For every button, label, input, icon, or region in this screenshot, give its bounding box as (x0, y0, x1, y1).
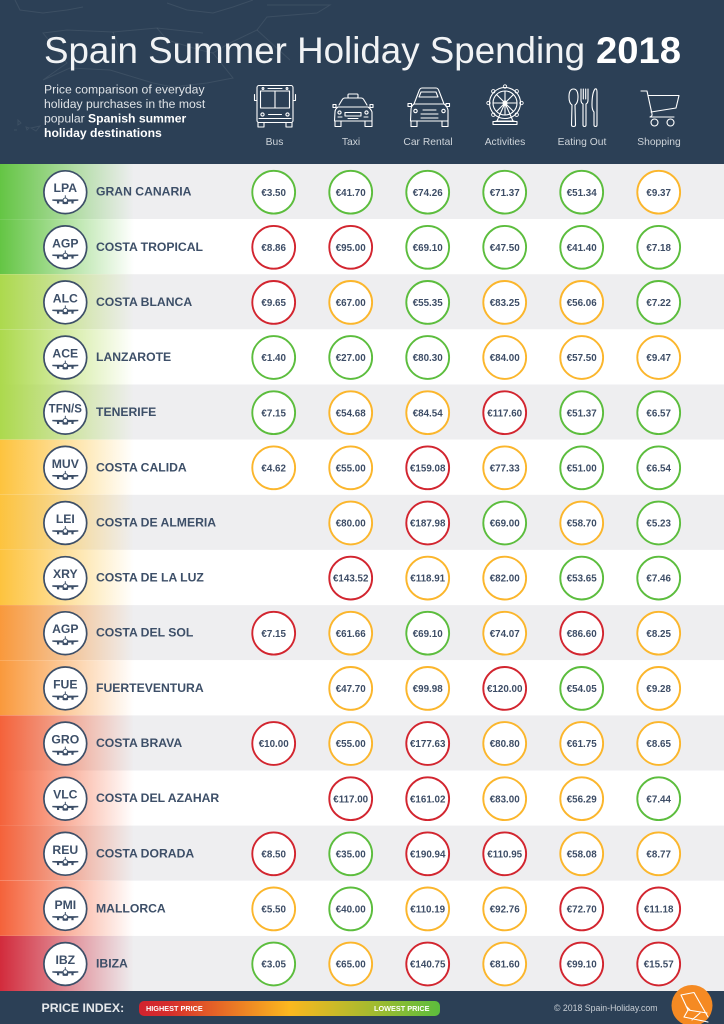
price cells: €99.98 (413, 684, 443, 695)
price cells: €117.60 (487, 408, 523, 419)
header background (0, 0, 724, 164)
row: Gran Canaria (0, 164, 724, 219)
price cells: €65.00 (336, 960, 366, 971)
price cells: €3.05 (261, 960, 287, 971)
badge: XRY (44, 557, 87, 599)
price cells (252, 281, 680, 324)
destination name: MALLORCA (96, 901, 166, 915)
label: activities: Activities (485, 137, 525, 148)
badge: GRO (44, 722, 87, 765)
title year: 2018 (596, 30, 681, 71)
price cells: €110.19 (410, 904, 446, 916)
row: Costa Calida (0, 440, 724, 495)
row: Costa Brava (0, 715, 724, 770)
row: Costa Tropical (0, 219, 724, 274)
price cells: €77.33 (490, 463, 520, 474)
badge: FUE: FUE (53, 677, 77, 691)
price cells: €11.18 (644, 904, 674, 916)
price cells: €5.23 (646, 519, 672, 530)
price cells: €143.52 (333, 574, 369, 585)
row: Ibiza (0, 936, 724, 992)
label: car rental: Car Rental (403, 137, 453, 148)
price cells (252, 612, 680, 655)
price cells: €54.68 (336, 408, 366, 419)
price cells: €83.00 (490, 794, 520, 805)
row: Fuerteventura (0, 660, 724, 715)
icon: cutlery (569, 89, 597, 126)
price cells: €55.00 (336, 463, 366, 474)
price cells: €27.00 (336, 353, 366, 364)
badge: VLC (44, 777, 87, 820)
price cells: €54.05 (567, 684, 597, 695)
price cells: €72.70 (567, 904, 597, 916)
label: bus: Bus (266, 137, 283, 148)
price cells (329, 502, 680, 544)
destination name: COSTA CALIDA (96, 460, 187, 474)
badge: TFN/S (44, 391, 87, 434)
destination name: COSTA BLANCA (96, 295, 192, 309)
icon: shopping cart (641, 91, 679, 126)
badge: IBZ (44, 943, 87, 985)
price cells: €190.94 (410, 849, 446, 860)
destination name: COSTA TROPICAL (96, 240, 204, 254)
price cells: €56.29 (567, 794, 597, 805)
price cells: €74.26 (413, 188, 443, 199)
price cells (252, 336, 680, 379)
badge: ACE: ACE (52, 346, 78, 360)
destination name: COSTA DEL AZAHAR (96, 791, 219, 805)
label: shopping: Shopping (637, 137, 681, 148)
badge: AGP (44, 612, 87, 655)
price cells: €81.60 (490, 960, 520, 971)
destination name: IBIZA (96, 956, 128, 970)
price cells: €8.50 (261, 849, 287, 860)
price cells: €35.00 (336, 849, 366, 860)
price cells: €15.57 (644, 960, 674, 971)
price cells (252, 391, 680, 434)
price cells (252, 722, 680, 765)
price cells: €5.50 (261, 904, 287, 916)
price cells: €9.28 (646, 684, 672, 695)
price cells: €7.15 (261, 629, 287, 640)
price cells: €8.86 (261, 243, 287, 254)
row: Costa Blanca (0, 274, 724, 329)
price cells: €61.66 (336, 629, 366, 640)
price cells: €118.91 (410, 574, 446, 585)
price cells: €161.02 (410, 794, 446, 805)
price cells: €41.70 (336, 188, 366, 199)
price cells: €41.40 (567, 243, 597, 254)
price cells: €55.00 (336, 739, 366, 750)
icon: bus (254, 86, 296, 127)
price cells: €9.37 (646, 188, 672, 199)
badge: LEI (44, 502, 87, 544)
destination name: GRAN CANARIA (96, 185, 192, 199)
destination name: FUERTEVENTURA (96, 681, 204, 695)
badge: REU (44, 832, 87, 875)
badge: PMI (44, 888, 87, 930)
price cells: €69.10 (413, 629, 443, 640)
price cells: €177.63 (410, 739, 446, 750)
destination name: COSTA DORADA (96, 846, 194, 860)
price cells: €56.06 (567, 298, 597, 309)
footer background (0, 991, 724, 1024)
title: Spain Summer Holiday Spending (44, 30, 585, 71)
price cells: €47.50 (490, 243, 520, 254)
price cells: €69.00 (490, 519, 520, 530)
price index gradient bar: LOWEST PRICE (374, 1004, 430, 1013)
destination name: COSTA DE LA LUZ (96, 571, 204, 585)
badge: ALC: ALC (53, 291, 78, 305)
price cells: €10.00 (259, 739, 289, 750)
price cells: €51.00 (567, 463, 597, 474)
row: Costa Dorada (0, 826, 724, 881)
row: Lanzarote (0, 329, 724, 384)
price cells (252, 943, 680, 985)
badge: ALC (44, 281, 87, 324)
price index label: PRICE INDEX: (42, 1001, 124, 1015)
destination name: COSTA BRAVA (96, 736, 182, 750)
intro text: popular Spanish summer (44, 112, 187, 126)
price cells: €8.25 (646, 629, 672, 640)
price cells: €84.54 (413, 408, 443, 419)
price cells: €47.70 (336, 684, 366, 695)
price cells: €80.80 (490, 739, 520, 750)
faint map of Spain (14, 0, 330, 131)
price cells: €83.25 (490, 298, 520, 309)
icon: beach chair badge (672, 985, 712, 1024)
row: Costa del Azahar (0, 770, 724, 826)
row: Costa de Almeria (0, 495, 724, 550)
destination name: TENERIFE (96, 405, 156, 419)
badge: GRO: GRO (51, 732, 79, 746)
price cells: €95.00 (336, 243, 366, 254)
badge: PMI: PMI (54, 898, 76, 912)
price cells (252, 832, 680, 875)
price cells: €117.00 (333, 794, 369, 805)
row: Mallorca (0, 881, 724, 936)
intro text (44, 82, 206, 140)
price cells (329, 777, 680, 820)
price cells: €86.60 (567, 629, 597, 640)
badge: LEI: LEI (56, 512, 75, 526)
price cells: €58.08 (567, 849, 597, 860)
price cells: €7.46 (646, 574, 672, 585)
price cells: €3.50 (261, 188, 287, 199)
intro text: Price comparison of everyday (44, 82, 205, 96)
price cells: €51.34 (567, 188, 597, 199)
price index gradient bar (139, 1001, 440, 1016)
badge: MUV (44, 446, 87, 489)
price cells: €7.18 (646, 243, 672, 254)
intro text: holiday purchases in the most (44, 97, 206, 111)
row: Costa del Sol (0, 605, 724, 660)
label: taxi: Taxi (342, 137, 360, 148)
price cells: €80.30 (413, 353, 443, 364)
price cells: €71.37 (490, 188, 520, 199)
icon: car rental (408, 88, 450, 126)
price cells: €92.76 (490, 904, 520, 916)
badge: AGP: AGP (52, 236, 79, 250)
price cells (329, 667, 680, 710)
price cells: €7.22 (646, 298, 672, 309)
price cells: €120.00 (487, 684, 523, 695)
price cells: €53.65 (567, 574, 597, 585)
badge: ACE (44, 336, 87, 379)
price cells: €58.70 (567, 519, 597, 530)
price cells: €4.62 (261, 463, 287, 474)
badge: AGP: AGP (52, 622, 79, 636)
badge: LPA: LPA (54, 181, 77, 195)
price cells: €67.00 (336, 298, 366, 309)
price cells (252, 226, 680, 269)
intro text: holiday destinations (44, 126, 162, 140)
price cells: €140.75 (410, 960, 446, 971)
icon: taxi (333, 94, 373, 126)
badge: AGP (44, 226, 87, 269)
price cells: €1.40 (261, 353, 287, 364)
price cells: €74.07 (490, 629, 520, 640)
price cells: €8.77 (646, 849, 672, 860)
price cells (329, 557, 680, 599)
price cells: €110.95 (487, 849, 523, 860)
price cells: €57.50 (567, 353, 597, 364)
price cells: €6.54 (646, 463, 672, 474)
destination name: COSTA DE ALMERIA (96, 516, 216, 530)
copyright: © 2018 Spain-Holiday.com (554, 1003, 658, 1013)
price cells (252, 446, 680, 489)
badge: LPA (44, 171, 87, 214)
row: Tenerife (0, 384, 724, 440)
price index gradient bar: HIGHEST PRICE (146, 1004, 203, 1013)
price cells: €80.00 (336, 519, 366, 530)
price cells: €7.15 (261, 408, 287, 419)
price cells: €6.57 (646, 408, 672, 419)
badge: REU: REU (52, 843, 78, 857)
price cells: €40.00 (336, 904, 366, 916)
badge: TFN/S: TFN/S (49, 404, 82, 416)
price cells: €9.65 (261, 298, 287, 309)
price cells: €159.08 (410, 463, 446, 474)
badge: XRY: XRY (53, 567, 78, 581)
badge: MUV: MUV (52, 457, 80, 471)
price cells: €8.65 (646, 739, 672, 750)
price cells: €55.35 (413, 298, 443, 309)
price cells: €7.44 (646, 794, 672, 805)
price cells: €84.00 (490, 353, 520, 364)
price cells (252, 171, 680, 214)
price cells: €69.10 (413, 243, 443, 254)
label: eating out: Eating Out (558, 137, 606, 148)
icon: ferris wheel (487, 85, 523, 124)
price cells: €61.75 (567, 739, 597, 750)
badge: IBZ: IBZ (55, 953, 76, 967)
badge: FUE (44, 667, 87, 710)
row: Costa de la Luz (0, 550, 724, 605)
destination name: COSTA DEL SOL (96, 626, 194, 640)
price cells: €99.10 (567, 960, 597, 971)
price cells: €9.47 (646, 353, 672, 364)
price cells: €82.00 (490, 574, 520, 585)
destination name: LANZAROTE (96, 350, 171, 364)
price cells: €187.98 (410, 519, 446, 530)
price cells: €51.37 (567, 408, 597, 419)
price cells (252, 888, 680, 930)
badge: VLC: VLC (53, 788, 78, 802)
